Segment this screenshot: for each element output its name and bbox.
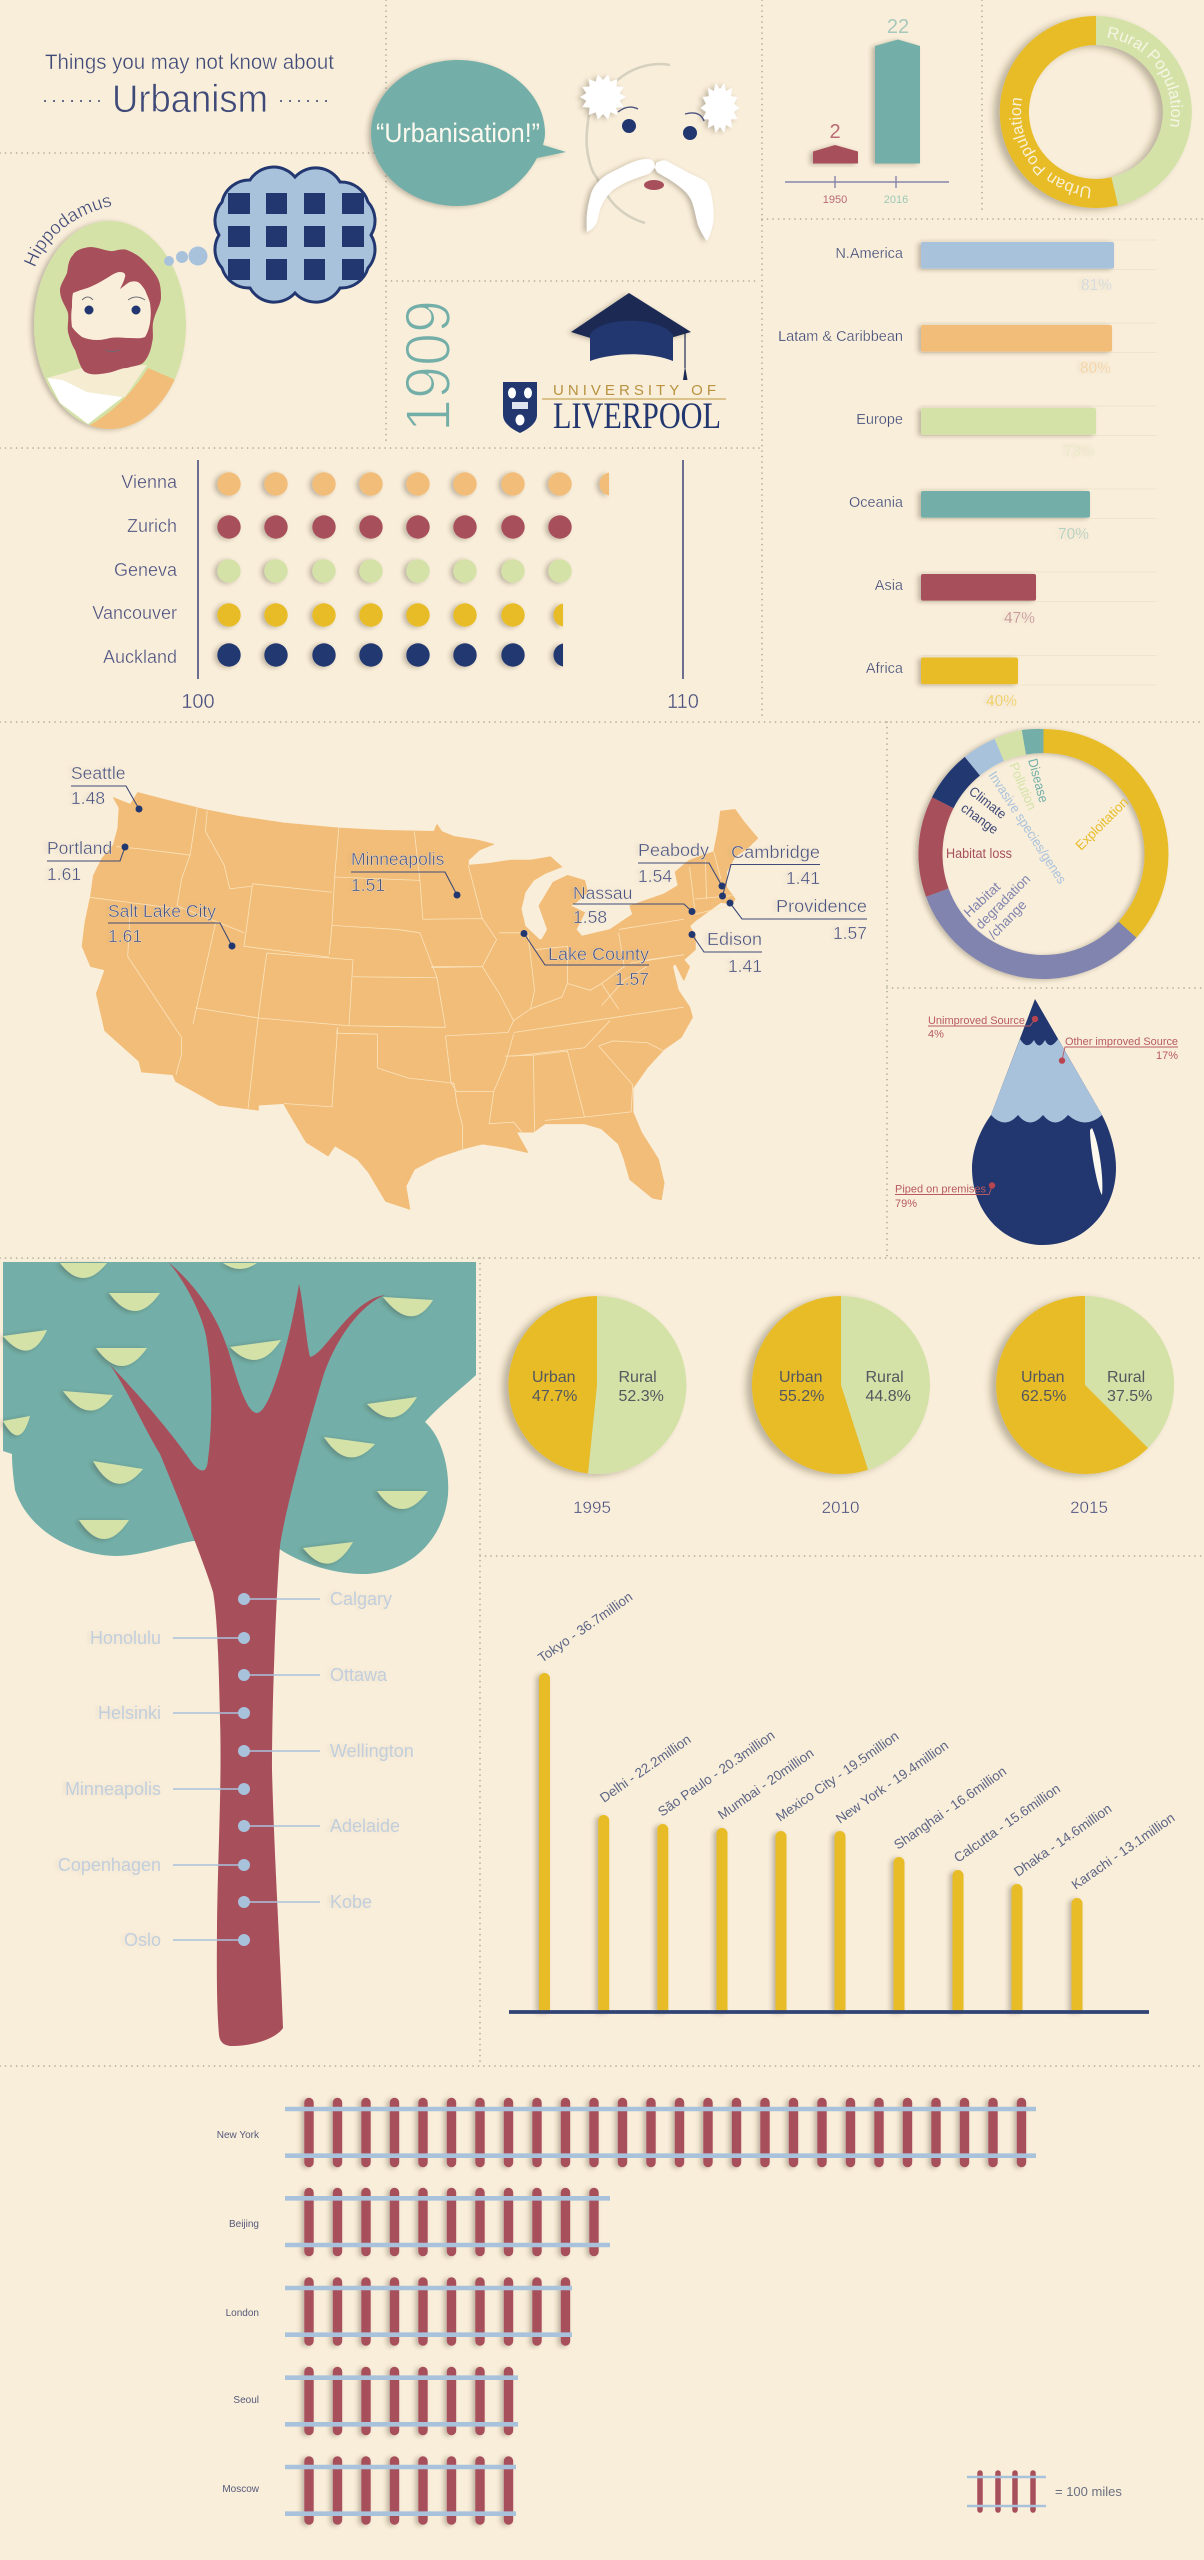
bar: Latam and Caribbean 80%: 80% bbox=[1080, 360, 1111, 377]
callout: Minneapolis bbox=[351, 849, 460, 898]
chart: biodiversity threats ring: Climate bbox=[966, 784, 1009, 822]
icon: Hippodamus portrait bbox=[24, 197, 186, 432]
callout: Lake County bbox=[520, 930, 649, 989]
callout: Nassau: Nassau bbox=[573, 883, 632, 903]
city labels: Copenhagen bbox=[58, 1855, 161, 1875]
chart: 1950 vs 2016 bars: 2 bbox=[829, 121, 841, 143]
row: Geneva: Geneva bbox=[114, 560, 178, 580]
icon: old man face bbox=[580, 64, 740, 241]
bar: Latam and Caribbean 80% bbox=[778, 325, 1112, 377]
chart: pie 2015: Rural bbox=[1107, 1369, 1145, 1386]
chart: 1950 vs 2016 bars: 2016 bbox=[884, 194, 908, 206]
bar: N.America 81% bbox=[835, 242, 1114, 294]
callout: Edison: Edison bbox=[707, 929, 762, 949]
chart: largest cities bars: Mexico City - 19.5million bbox=[773, 1728, 902, 1824]
tree crown bbox=[3, 1262, 476, 1574]
row: Zurich: Zurich bbox=[127, 516, 177, 536]
row: Vancouver: Vancouver bbox=[92, 603, 177, 623]
callout: Edison bbox=[688, 929, 762, 976]
callout: Cambridge bbox=[719, 842, 820, 900]
callout: Seattle bbox=[71, 763, 142, 812]
bar: Asia 47%: Asia bbox=[875, 578, 904, 594]
chart: pie 1995: 52.3% bbox=[618, 1388, 664, 1405]
chart: city dot rows: 100 bbox=[181, 691, 215, 713]
bar: Europe 73% bbox=[856, 408, 1096, 460]
bar: Oceania 70%: 70% bbox=[1058, 526, 1089, 543]
city markers bbox=[173, 1593, 320, 1946]
bar: Europe 73%: 73% bbox=[1064, 443, 1095, 460]
callout: Portland: 1.61 bbox=[47, 864, 81, 884]
icon: water drop chart bbox=[895, 999, 1178, 1245]
chart: metro rail Beijing bbox=[229, 2192, 610, 2252]
chart: biodiversity threats ring bbox=[918, 729, 1168, 979]
callout: Providence: Providence bbox=[776, 896, 867, 916]
row: Auckland: Auckland bbox=[103, 647, 177, 667]
map: United States bbox=[82, 793, 758, 1209]
chart: biodiversity threats ring: Exploitation bbox=[1073, 794, 1131, 853]
chart: urban and rural population donut: Rural Population bbox=[1108, 26, 1183, 127]
chart: pie 2010: Rural bbox=[866, 1369, 904, 1386]
callout: Unimproved Source bbox=[928, 1015, 1038, 1040]
title: Urbanism bbox=[112, 78, 268, 121]
callout: Unimproved Source: 4% bbox=[928, 1028, 944, 1040]
chart: pie 2010 bbox=[752, 1296, 930, 1517]
University of Liverpool logo: UNIVERSITY OF bbox=[553, 382, 716, 399]
chart: urbanisation by region bars bbox=[778, 240, 1157, 710]
chart: biodiversity threats ring: Pollution bbox=[1006, 760, 1040, 812]
chart: pie 1995: Rural bbox=[618, 1369, 657, 1386]
year 1909: 1909 bbox=[392, 300, 464, 432]
row: Geneva bbox=[114, 559, 572, 583]
chart: largest cities bars bbox=[509, 1589, 1178, 2012]
callout: Peabody: Peabody bbox=[638, 840, 709, 860]
chart: 1950 vs 2016 bars: 22 bbox=[887, 16, 909, 38]
chart: metro rail Moscow bbox=[222, 2461, 516, 2520]
bar: N.America 81%: N.America bbox=[835, 246, 904, 262]
chart: pie 2015: 62.5% bbox=[1021, 1388, 1066, 1405]
callout: Edison: 1.41 bbox=[728, 956, 762, 976]
chart: metro rail Moscow: Moscow bbox=[222, 2484, 260, 2495]
city labels: Honolulu bbox=[90, 1628, 161, 1648]
bar: Asia 47% bbox=[875, 574, 1036, 627]
row: Zurich bbox=[127, 515, 572, 539]
leaves bbox=[3, 1263, 433, 1564]
title: Things you may not know about bbox=[45, 51, 334, 74]
chart: largest cities bars: Delhi - 22.2million bbox=[597, 1732, 694, 1805]
row: Vienna bbox=[121, 472, 609, 496]
callout: Portland: Portland bbox=[47, 838, 112, 858]
chart: 1950 vs 2016 bars bbox=[785, 16, 949, 206]
callout: Providence bbox=[726, 896, 867, 943]
callout: Other improved Source: 17% bbox=[1156, 1050, 1178, 1062]
chart: urban and rural population donut: Urban Population bbox=[1009, 98, 1090, 198]
bar: N.America 81%: 81% bbox=[1081, 277, 1112, 294]
chart: pie 1995: Urban bbox=[532, 1369, 576, 1386]
chart: pie 1995: 1995 bbox=[573, 1498, 611, 1517]
bar: Asia 47%: 47% bbox=[1004, 610, 1035, 627]
city labels bbox=[58, 1589, 414, 1950]
chart: pie 2015: 37.5% bbox=[1107, 1388, 1152, 1405]
callout: Providence: 1.57 bbox=[833, 923, 867, 943]
chart: urban and rural population donut bbox=[990, 14, 1192, 214]
callout: Seattle: 1.48 bbox=[71, 788, 105, 808]
chart: largest cities bars: New York - 19.4million bbox=[833, 1738, 951, 1826]
city labels: Adelaide bbox=[330, 1816, 400, 1836]
callout: Other improved Source: Other improved Source bbox=[1065, 1036, 1178, 1048]
icon: thought cloud with grid bbox=[164, 167, 375, 302]
callout: Cambridge: 1.41 bbox=[786, 868, 820, 888]
chart: pie 1995 bbox=[508, 1296, 686, 1517]
callout: Piped on premises bbox=[895, 1182, 995, 1210]
bar: Latam and Caribbean 80%: Latam & Caribbean bbox=[778, 329, 903, 345]
chart: pie 2015 bbox=[996, 1296, 1174, 1517]
callout: Salt Lake City: 1.61 bbox=[108, 926, 142, 946]
chart: metro rail Beijing: Beijing bbox=[229, 2219, 259, 2230]
callout: Nassau: 1.58 bbox=[573, 907, 607, 927]
callout: Unimproved Source: Unimproved Source bbox=[928, 1015, 1025, 1027]
title bbox=[45, 51, 334, 121]
chart: largest cities bars: Mumbai - 20million bbox=[715, 1745, 817, 1822]
chart: biodiversity threats ring: Habitat bbox=[961, 879, 1003, 920]
callout: Minneapolis: Minneapolis bbox=[351, 849, 445, 869]
bar: Oceania 70%: Oceania bbox=[849, 495, 904, 511]
tree trunk bbox=[110, 1262, 385, 2046]
University of Liverpool logo bbox=[503, 382, 726, 437]
chart: largest cities bars: Shanghai - 16.6million bbox=[891, 1764, 1009, 1852]
chart: biodiversity threats ring: degradation bbox=[973, 871, 1033, 932]
chart: metro rail London: London bbox=[226, 2308, 259, 2319]
callout: Salt Lake City bbox=[108, 901, 236, 950]
icon: tree of cities bbox=[3, 1262, 476, 2046]
city labels: Ottawa bbox=[330, 1665, 388, 1685]
chart: pie 2015: 2015 bbox=[1070, 1498, 1108, 1517]
chart: biodiversity threats ring: Habitat loss bbox=[946, 846, 1012, 861]
chart: largest cities bars: Dhaka - 14.6million bbox=[1011, 1801, 1114, 1879]
chart: pie 2010: 44.8% bbox=[866, 1388, 911, 1405]
row: Vancouver bbox=[92, 603, 563, 627]
chart: largest cities bars: São Paulo - 20.3million bbox=[655, 1728, 777, 1819]
chart: largest cities bars: Tokyo - 36.7million bbox=[535, 1589, 635, 1665]
chart: metro rail Seoul bbox=[233, 2372, 518, 2430]
chart: biodiversity threats ring: Invasive species/genes bbox=[985, 768, 1070, 887]
city labels: Wellington bbox=[330, 1741, 414, 1761]
callout: Seattle: Seattle bbox=[71, 763, 125, 783]
callout: Peabody: 1.54 bbox=[638, 866, 672, 886]
icon: graduation cap bbox=[571, 293, 691, 380]
speech bubble: “Urbanisation!” bbox=[376, 118, 540, 148]
legend: rail equals 100 miles bbox=[967, 2473, 1122, 2510]
University of Liverpool logo: LIVERPOOL bbox=[553, 396, 721, 437]
callout: Piped on premises: Piped on premises bbox=[895, 1184, 986, 1196]
chart: pie 1995: 47.7% bbox=[532, 1388, 577, 1405]
chart: metro rail New York: New York bbox=[217, 2130, 260, 2141]
bar: Oceania 70% bbox=[849, 491, 1090, 543]
chart: metro rail Seoul: Seoul bbox=[233, 2395, 259, 2406]
city labels: Oslo bbox=[124, 1930, 161, 1950]
chart: biodiversity threats ring: Disease bbox=[1025, 757, 1051, 804]
row: Vienna: Vienna bbox=[121, 472, 178, 492]
chart: city dot rows bbox=[92, 460, 699, 713]
speech bubble bbox=[371, 60, 566, 206]
city labels: Calgary bbox=[330, 1589, 392, 1609]
city labels: Kobe bbox=[330, 1892, 372, 1912]
bar: Europe 73%: Europe bbox=[856, 412, 903, 428]
chart: biodiversity threats ring: change bbox=[958, 800, 1001, 837]
chart: metro rail London bbox=[226, 2282, 572, 2341]
callout: Nassau bbox=[573, 883, 696, 927]
callout: Salt Lake City: Salt Lake City bbox=[108, 901, 216, 921]
bar: Africa 40%: 40% bbox=[986, 693, 1017, 710]
chart: pie 2010: 55.2% bbox=[779, 1388, 824, 1405]
legend: rail equals 100 miles: = 100 miles bbox=[1055, 2484, 1122, 2499]
chart: pie 2010: Urban bbox=[779, 1369, 823, 1386]
chart: biodiversity threats ring: /change bbox=[985, 897, 1030, 942]
chart: largest cities bars: Calcutta - 15.6million bbox=[951, 1781, 1063, 1865]
city labels: Minneapolis bbox=[65, 1779, 161, 1799]
callout: Other improved Source bbox=[1059, 1036, 1178, 1064]
chart: metro rail New York bbox=[217, 2102, 1036, 2162]
icon: Hippodamus portrait: Hippodamus bbox=[24, 197, 112, 266]
city labels: Helsinki bbox=[98, 1703, 161, 1723]
callout: Piped on premises: 79% bbox=[895, 1198, 917, 1210]
chart: pie 2010: 2010 bbox=[822, 1498, 860, 1517]
callout: Lake County: 1.57 bbox=[615, 969, 649, 989]
callout: Portland bbox=[47, 838, 128, 884]
callout: Minneapolis: 1.51 bbox=[351, 875, 385, 895]
bar: Africa 40%: Africa bbox=[866, 661, 904, 677]
callout: Lake County: Lake County bbox=[548, 944, 649, 964]
chart: city dot rows: 110 bbox=[667, 691, 699, 713]
chart: 1950 vs 2016 bars: 1950 bbox=[823, 194, 847, 206]
chart: pie 2015: Urban bbox=[1021, 1369, 1065, 1386]
chart: largest cities bars: Karachi - 13.1million bbox=[1069, 1810, 1178, 1892]
row: Auckland bbox=[103, 643, 563, 667]
callout: Cambridge: Cambridge bbox=[731, 842, 820, 862]
bar: Africa 40% bbox=[866, 658, 1018, 710]
callout: Peabody bbox=[638, 840, 726, 890]
